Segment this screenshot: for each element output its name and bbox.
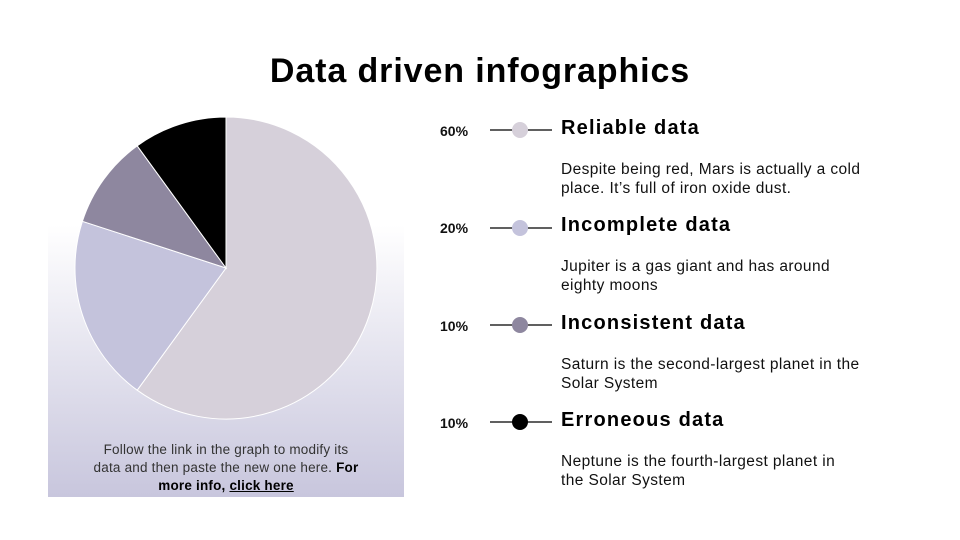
item 1 [440, 117, 860, 197]
note text: more info, click here [158, 478, 294, 493]
item 2: eighty moons [561, 277, 658, 294]
note text: Follow the link in the graph to modify its [104, 442, 348, 457]
item 3 [440, 312, 860, 392]
item 1: place. It’s full of iron oxide dust. [561, 180, 791, 197]
item 1: Reliable data [561, 117, 700, 139]
item 3: Inconsistent data [561, 312, 746, 334]
item 4 [440, 409, 835, 489]
title: Data driven infographics [270, 52, 690, 90]
item 1: Despite being red, Mars is actually a cold [561, 161, 860, 178]
item 4: 10% [440, 415, 468, 431]
note text [94, 442, 358, 493]
item 1: 60% [440, 123, 468, 139]
item 2: Incomplete data [561, 214, 731, 236]
item 2: 20% [440, 220, 468, 236]
item 4: Neptune is the fourth-largest planet in [561, 453, 835, 470]
item 4: Erroneous data [561, 409, 724, 431]
item 2: Jupiter is a gas giant and has around [561, 258, 830, 275]
panel: chart background [48, 225, 404, 497]
item 4: the Solar System [561, 472, 685, 489]
item 2 [440, 214, 830, 294]
item 3: Solar System [561, 375, 658, 392]
item 3: Saturn is the second-largest planet in the [561, 356, 860, 373]
note text: data and then paste the new one here. For [94, 460, 358, 475]
item 3: 10% [440, 318, 468, 334]
